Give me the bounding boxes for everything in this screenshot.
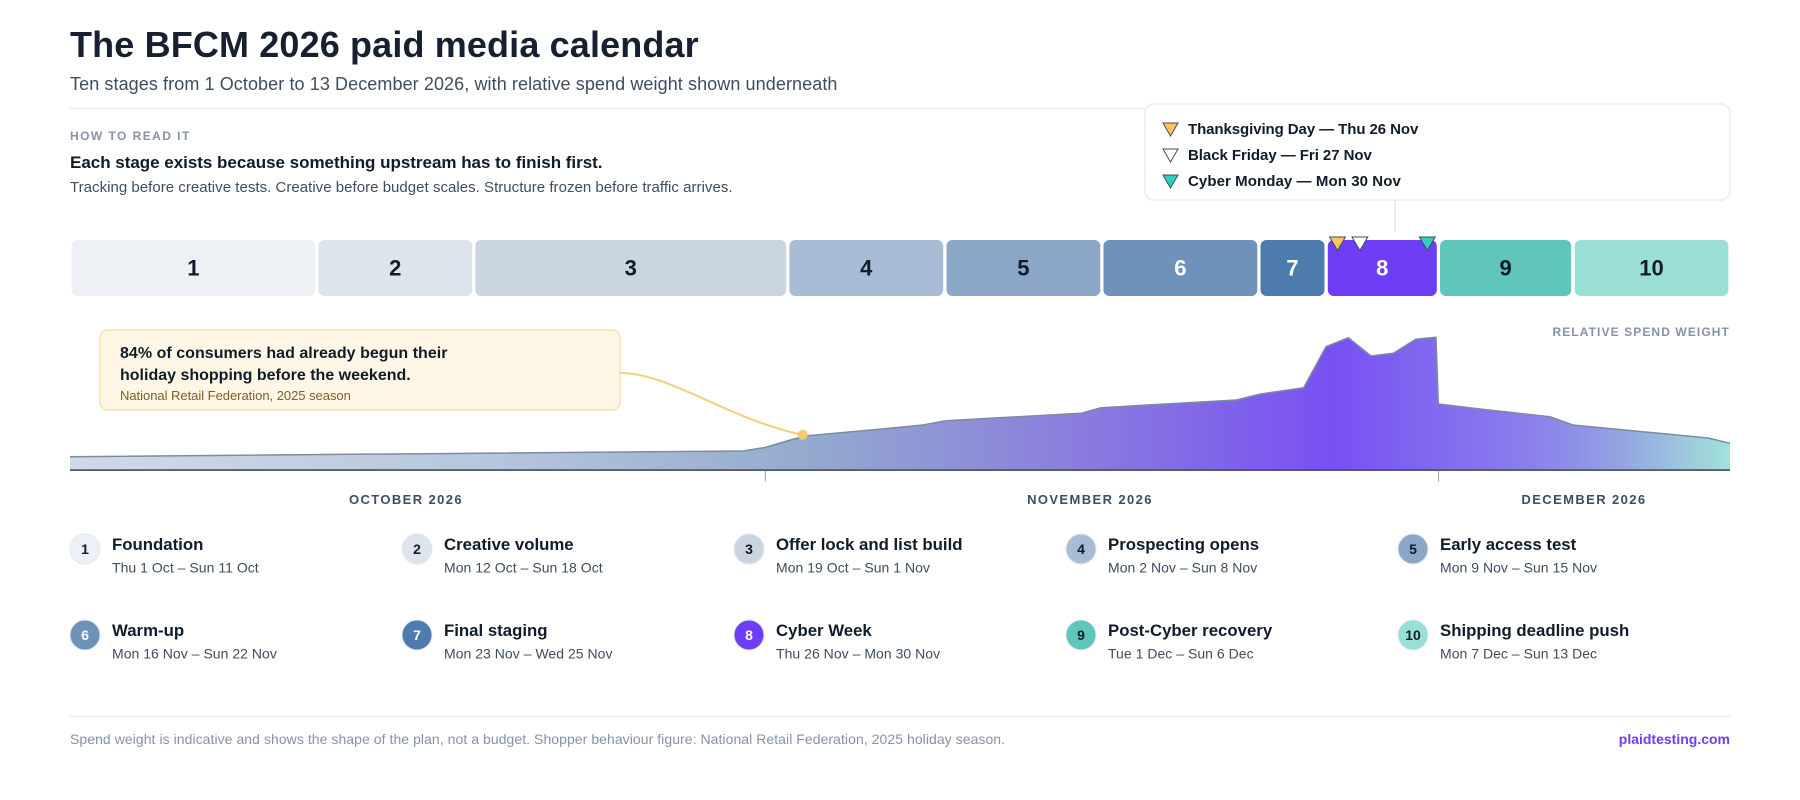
item 8: Thu 26 Nov – Mon 30 Nov	[776, 646, 940, 662]
item 1	[70, 534, 259, 576]
stage 10: 10	[1639, 256, 1664, 280]
item 8: 8	[745, 627, 753, 643]
connector from callout to chart	[620, 373, 808, 440]
stage 1: 1	[187, 256, 200, 280]
item 9: 9	[1077, 627, 1085, 643]
month label: November: NOVEMBER 2026	[1027, 492, 1153, 507]
callout: shopper behaviour	[100, 330, 620, 410]
stage 6	[1104, 240, 1257, 296]
callout: shopper behaviour: 84% of consumers had already begun their	[120, 345, 448, 362]
item 6: Mon 16 Nov – Sun 22 Nov	[112, 646, 277, 662]
item 9: Tue 1 Dec – Sun 6 Dec	[1108, 646, 1254, 662]
stage 2	[318, 240, 472, 296]
item 4	[1066, 534, 1259, 576]
stage 9: 9	[1499, 256, 1512, 280]
item 5: Early access test	[1440, 535, 1577, 554]
item 5	[1398, 534, 1597, 576]
stage timeline bar	[72, 240, 1728, 296]
how to read body: Tracking before creative tests. Creative before budget scales. Structure frozen before traffic arrives.	[70, 179, 733, 196]
eyebrow label: HOW TO READ IT	[70, 129, 191, 143]
item 5: Mon 9 Nov – Sun 15 Nov	[1440, 560, 1597, 576]
item 10: 10	[1405, 627, 1421, 643]
item 5: 5	[1409, 541, 1417, 557]
item 6: 6	[81, 627, 89, 643]
item 3: 3	[745, 541, 753, 557]
subtitle: Ten stages from 1 October to 13 December 2026, with relative spend weight shown underneath	[70, 74, 838, 94]
item 9: Post-Cyber recovery	[1108, 621, 1273, 640]
item 8: Cyber Week	[776, 621, 872, 640]
item 6: Warm-up	[112, 621, 184, 640]
how to read it block	[70, 129, 733, 196]
item 1: Foundation	[112, 535, 203, 554]
month label: December: DECEMBER 2026	[1521, 492, 1647, 507]
legend: Thanksgiving Day: Thanksgiving Day — Thu 26 Nov	[1188, 121, 1419, 138]
stage 8	[1328, 240, 1437, 296]
marker: Thanksgiving	[1330, 237, 1345, 250]
stage 5	[946, 240, 1100, 296]
stage 5: 5	[1017, 256, 1030, 280]
stage 1	[72, 240, 315, 296]
item 8	[734, 620, 940, 662]
item 2: Mon 12 Oct – Sun 18 Oct	[444, 560, 603, 576]
stage 3: 3	[625, 256, 637, 280]
item 3: Offer lock and list build	[776, 535, 962, 554]
stage 6: 6	[1174, 256, 1187, 280]
stage 8: 8	[1376, 256, 1388, 280]
legend: Black Friday: Black Friday — Fri 27 Nov	[1188, 147, 1373, 164]
item 2: 2	[413, 541, 421, 557]
item 7: 7	[413, 627, 421, 643]
item 3	[734, 534, 962, 576]
how to read heading: Each stage exists because something upstream has to finish first.	[70, 153, 602, 172]
item 10: Mon 7 Dec – Sun 13 Dec	[1440, 646, 1597, 662]
item 7	[402, 620, 613, 662]
site credit: plaidtesting.com	[1619, 731, 1730, 747]
stage 4: 4	[860, 256, 873, 280]
item 1: Thu 1 Oct – Sun 11 Oct	[112, 560, 259, 576]
title: The BFCM 2026 paid media calendar	[70, 24, 699, 65]
item 4: 4	[1077, 541, 1085, 557]
stage 3	[475, 240, 786, 296]
spend weight area chart	[70, 337, 1730, 482]
item 1: 1	[81, 541, 89, 557]
item 4: Mon 2 Nov – Sun 8 Nov	[1108, 560, 1257, 576]
stage 4	[789, 240, 943, 296]
item 2: Creative volume	[444, 535, 574, 554]
stage 10	[1575, 240, 1728, 296]
item 7: Final staging	[444, 621, 548, 640]
item 3: Mon 19 Oct – Sun 1 Nov	[776, 560, 930, 576]
item 10: Shipping deadline push	[1440, 621, 1629, 640]
legend: Cyber Monday: Cyber Monday — Mon 30 Nov	[1188, 173, 1401, 190]
item 10	[1398, 620, 1629, 662]
month label: October: OCTOBER 2026	[349, 492, 463, 507]
callout: shopper behaviour: National Retail Federation, 2025 season	[120, 388, 351, 403]
stage list	[70, 534, 1629, 662]
stage 7	[1260, 240, 1324, 296]
item 9	[1066, 620, 1273, 662]
marker: Cyber Monday	[1419, 237, 1435, 250]
marker: Black Friday	[1352, 237, 1368, 250]
spend weight label: RELATIVE SPEND WEIGHT	[1552, 325, 1730, 339]
item 2	[402, 534, 603, 576]
stage 7: 7	[1286, 256, 1299, 280]
stage 9	[1440, 240, 1571, 296]
stage 2: 2	[389, 256, 401, 280]
footnote: Spend weight is indicative and shows the shape of the plan, not a budget. Shopper behaviour figure: National Retail Federation, 2025 holiday season.	[70, 731, 1005, 747]
key dates legend card	[1145, 104, 1730, 200]
item 6	[70, 620, 277, 662]
item 7: Mon 23 Nov – Wed 25 Nov	[444, 646, 613, 662]
callout: shopper behaviour: holiday shopping before the weekend.	[120, 367, 411, 384]
item 4: Prospecting opens	[1108, 535, 1259, 554]
